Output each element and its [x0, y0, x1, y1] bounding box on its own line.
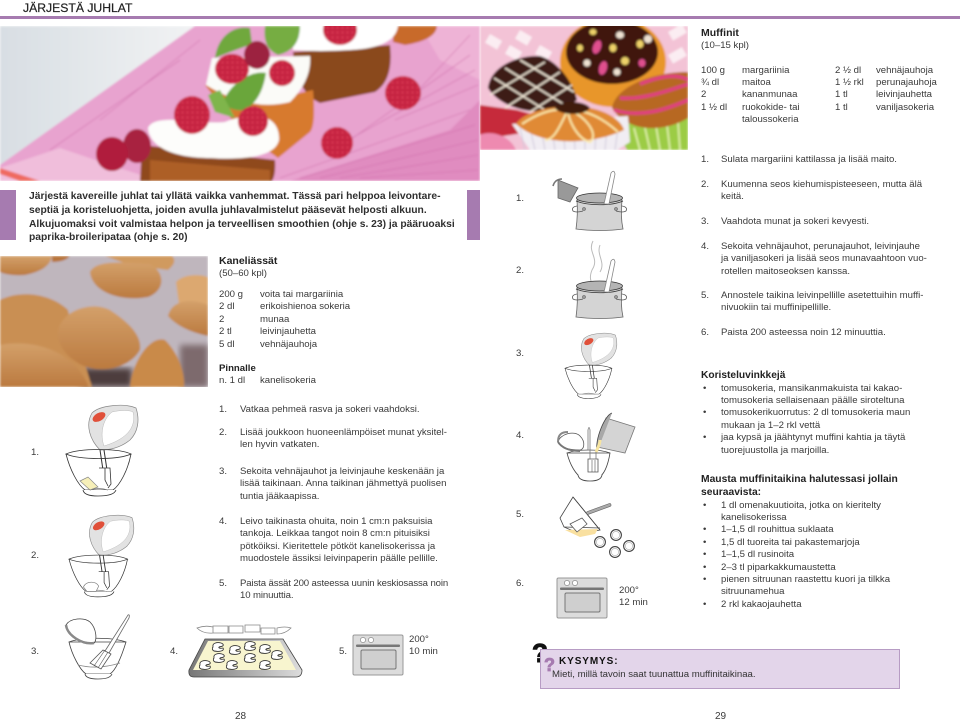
step label 2: right page: 2.: [516, 265, 524, 276]
ingredient list: Muffinit: 1 ½ rkl: [835, 77, 864, 88]
flavour variations: seuraavista:: [701, 487, 761, 498]
ingredient list: Muffinit: vaniljasokeria: [876, 102, 934, 113]
flavour variations: •: [703, 524, 706, 535]
ingredient list: Muffinit: margariinia: [742, 64, 789, 76]
flavour variations: pienen sitruunan raastettu kuori ja tilkka: [721, 574, 890, 585]
leaves: [215, 27, 252, 58]
ingredient list: Muffinit: ruokokide- tai: [742, 102, 800, 113]
ingredient list: Muffinit: vehnäjauhoja: [876, 64, 933, 76]
flavour variations: 2 rkl kakaojauhetta: [721, 599, 802, 610]
step label 3: right page: 3.: [516, 348, 524, 359]
ingredient list: Muffinit: maitoa: [742, 77, 771, 88]
ingredient list: Muffinit: taloussokeria: [742, 114, 799, 125]
steps: Muffinit: Sulata margariini kattilassa ja lisää maito.: [721, 154, 897, 165]
topping ingredients: n. 1 dl: [219, 375, 245, 386]
icon: baking sheet with S cookies: [189, 625, 302, 677]
step label 5: right page: 5.: [516, 509, 524, 520]
icon: oven: [353, 635, 403, 675]
steps: Kaneliässät: 10 minuuttia.: [240, 590, 293, 601]
illustrations: left page: [64, 404, 404, 680]
flavour variations: •: [703, 599, 706, 610]
recipe title: Kaneliässät: [219, 255, 278, 279]
ingredient list: Kaneliässät: erikoishienoa sokeria: [260, 301, 350, 312]
icon: oven: [557, 578, 607, 618]
ingredient list: Kaneliässät: 5 dl: [219, 339, 234, 350]
flavour variations: •: [703, 537, 706, 548]
steps: Muffinit: Kuumenna seos kiehumispisteeseen, mutta älä: [721, 179, 922, 190]
steps: Kaneliässät: Leivo taikinasta ohuita, noin 1 cm:n paksuisia: [240, 516, 433, 527]
intro paragraph: Alkujuomaksi voit valmistaa helpon ja terveellisen smoothien (ohje s. 23) ja pääruoaksi: [29, 219, 455, 230]
step 5 label: left page: 5.: [339, 646, 347, 657]
ingredient list: Kaneliässät: 2 tl: [219, 326, 232, 337]
steps: Kaneliässät: Lisää joukkoon huoneenlämpöiset munat yksitel-: [240, 427, 447, 438]
ingredient list: Muffinit: 1 ½ dl: [701, 102, 727, 113]
step 2 label: left page: 2.: [31, 550, 39, 561]
photo: decorated muffins: [480, 26, 688, 150]
callout text: Mieti, millä tavoin saat tuunattua muffinitaikinaa.: [552, 668, 756, 680]
cream: [293, 26, 398, 51]
decorating tips: mukaan ja 1–2 rkl vettä: [721, 420, 820, 431]
flavour variations: sitruunamehua: [721, 586, 784, 597]
steps: Kaneliässät: 4.: [219, 516, 227, 527]
steps: Kaneliässät: pötköiksi. Kieritettele pötköt kanelisokerissa ja: [240, 541, 435, 552]
topping ingredients: kanelisokeria: [260, 375, 316, 386]
decorating tips: tomusokeria sellaisenaan päälle siroteltuna: [721, 395, 904, 406]
steps: Kaneliässät: 3.: [219, 466, 227, 477]
steps: Kaneliässät: Vatkaa pehmeä rasva ja sokeri vaahdoksi.: [240, 404, 420, 415]
raspberries: [174, 96, 210, 134]
header rule: [0, 16, 960, 19]
flavour variations: kanelisokerissa: [721, 512, 787, 523]
oven setting: right page: 200°: [619, 585, 639, 596]
photo: raspberry cake slices on pink plate: [0, 26, 480, 181]
decorating tips: tuorejuustolla ja marjoilla.: [721, 445, 829, 456]
step label 6: right page: 6.: [516, 578, 524, 589]
oven setting: left page: 200°: [409, 634, 429, 645]
page heading: JÄRJESTÄ JUHLAT: [23, 1, 132, 15]
flavour variations: [701, 474, 898, 610]
chocolate cupcake: [560, 17, 666, 107]
steps: Kaneliässät: 2.: [219, 427, 227, 438]
decorating tips: tomusokeria, mansikanmakuista tai kakao-: [721, 382, 902, 394]
recipe title: Kaneliässät: (50–60 kpl): [219, 268, 267, 279]
ingredient list: Kaneliässät: leivinjauhetta: [260, 326, 316, 337]
ingredient list: Muffinit: 100 g: [701, 64, 725, 76]
steps: Muffinit: 1.: [701, 154, 709, 165]
photo: cinnamon S cookies: [0, 256, 208, 387]
ingredient list: Muffinit: kananmunaa: [742, 89, 797, 100]
flavour variations: •: [703, 500, 706, 510]
decorating tips: •: [703, 382, 706, 394]
pink frosted cupcake: [612, 118, 688, 150]
ingredient list: Kaneliässät: voita tai margariinia: [260, 289, 343, 300]
oven setting: left page: [409, 634, 438, 657]
oven setting: left page: 10 min: [409, 646, 438, 657]
ingredient list: Muffinit: 1 tl: [835, 89, 848, 100]
ingredient list: Kaneliässät: vehnäjauhoja: [260, 339, 317, 350]
intro paragraph: [29, 191, 455, 243]
steps: Muffinit: keitä.: [721, 191, 744, 202]
step labels: left page: 1.: [31, 447, 39, 458]
ingredient list: Kaneliässät: munaa: [260, 314, 289, 325]
step 4 label: left page: 4.: [170, 646, 178, 657]
steps: Muffinit: Vaahdota munat ja sokeri kevyesti.: [721, 216, 869, 227]
steps: Muffinit: [701, 154, 927, 338]
icon: mixer with eggs: [69, 515, 134, 597]
decorating tips: [701, 370, 910, 456]
ingredient list: Muffinit: 1 tl: [835, 102, 848, 113]
ingredient list: Muffinit: 2: [701, 89, 706, 100]
callout heading: KYSYMYS:: [559, 656, 618, 666]
decorating tips: •: [703, 432, 706, 443]
icon: flour bowl and brush: [66, 615, 129, 679]
steps: Kaneliässät: [219, 404, 448, 601]
steps: Muffinit: Paista 200 asteessa noin 12 minuuttia.: [721, 327, 886, 338]
step label 1: right page: 1.: [516, 193, 524, 204]
ingredient list: Muffinit: [701, 64, 937, 125]
recipe title: Muffinit: Muffinit: [701, 27, 739, 39]
piped flower cupcake: [512, 116, 630, 150]
steps: Kaneliässät: tuntia jääkaapissa.: [240, 491, 319, 502]
steps: Muffinit: Annostele taikina leivinpellille asetettuihin muffi-: [721, 290, 923, 301]
steps: Muffinit: ja vaniljasokeri ja lisää seos munavaahtoon vuo-: [721, 253, 927, 264]
decorating tips: jaa kypsä ja jäähtynyt muffini kahtia ja täytä: [721, 432, 905, 443]
flavour variations: Mausta muffinitaikina halutessasi jollain: [701, 474, 898, 484]
ingredient list: Kaneliässät: 2: [219, 314, 224, 325]
question callout: [540, 649, 900, 689]
steps: Muffinit: 6.: [701, 327, 709, 338]
ingredient list: Muffinit: leivinjauhetta: [876, 89, 932, 100]
steps: Kaneliässät: Sekoita vehnäjauhot ja leivinjauhe keskenään ja: [240, 466, 444, 477]
icon: spatula filling muffin cups: [560, 497, 634, 557]
flavour variations: •: [703, 562, 706, 573]
flavour variations: 2–3 tl piparkakkumaustetta: [721, 562, 836, 573]
flavour variations: 1–1,5 dl rouhittua suklaata: [721, 524, 834, 535]
intro paragraph: Järjestä kavereille juhlat tai yllätä vaikka vanhemmat. Tässä pari helppoa leivontare-: [29, 191, 440, 202]
recipe title: Muffinit: (10–15 kpl): [701, 40, 749, 51]
lattice cupcake: [480, 105, 570, 140]
flavour variations: 1–1,5 dl rusinoita: [721, 549, 794, 560]
cake slices: [393, 26, 437, 45]
step label 4: right page: 4.: [516, 430, 524, 441]
decorating tips: tomusokerikuorrutus: 2 dl tomusokeria maun: [721, 407, 910, 418]
ingredient list: Kaneliässät: 2 dl: [219, 301, 234, 312]
steps: Muffinit: nivuokiin tai muffinipellille.: [721, 302, 831, 313]
topping ingredients: Pinnalle: [219, 363, 256, 374]
intro paragraph: septiä ja koristeluohjetta, joiden avulla juhlavalmistelut pääsevät helposti alkuun.: [29, 205, 427, 216]
ingredient list: Muffinit: 2 ½ dl: [835, 64, 861, 76]
icon: pouring milk into pot: [553, 171, 626, 230]
decorating tips: •: [703, 407, 706, 418]
recipe title: Kaneliässät: Kaneliässät: [219, 255, 277, 267]
steps: Muffinit: rotellen maitoseoksen kanssa.: [721, 266, 850, 277]
intro paragraph: paprika-broileripataa (ohje s. 20): [29, 232, 188, 243]
ingredient list: Muffinit: ¾ dl: [701, 77, 719, 88]
ingredient list: Muffinit: perunajauhoja: [876, 77, 937, 88]
flavour variations: •: [703, 574, 706, 585]
steps: Kaneliässät: 1.: [219, 404, 227, 415]
flavour variations: 1,5 dl tuoreita tai pakastemarjoja: [721, 537, 860, 548]
center side tab: [467, 190, 480, 240]
icon: adding flour and milk to bowl: [558, 413, 635, 481]
flavour variations: •: [703, 549, 706, 560]
decorating tips: Koristeluvinkkejä: [701, 370, 785, 381]
steps: Kaneliässät: len hyvin vatkaten.: [240, 439, 319, 450]
illustrations: right page: [552, 170, 636, 618]
ingredient list: Kaneliässät: 200 g: [219, 289, 243, 300]
steps: Muffinit: 5.: [701, 290, 709, 301]
topping ingredients: [219, 363, 316, 386]
left side tab: [0, 190, 16, 240]
steps: Kaneliässät: muodostele ässiksi leivinpaperin päälle pellille.: [240, 553, 438, 564]
steps: Kaneliässät: 5.: [219, 578, 227, 589]
steps: Muffinit: 2.: [701, 179, 709, 190]
recipe title: Muffinit: [701, 27, 749, 51]
steps: Kaneliässät: Paista ässät 200 asteessa uunin keskiosassa noin: [240, 578, 448, 589]
icon: steaming pot: [572, 241, 626, 318]
flavour variations: 1 dl omenakuutioita, jotka on kieritelty: [721, 500, 881, 510]
oven setting: right page: [619, 585, 648, 608]
oven setting: right page: 12 min: [619, 597, 648, 608]
steps: Muffinit: Sekoita vehnäjauhot, perunajauhot, leivinjauhe: [721, 241, 920, 252]
steps: Muffinit: 3.: [701, 216, 709, 227]
icon: mixer beating butter: [66, 405, 138, 496]
question icon: purple: ?: [544, 655, 555, 675]
icon: mixer beating eggs and sugar: [565, 333, 617, 399]
steps: Kaneliässät: tankoja. Leikkaa tangot noin 8 cm:n pituisiksi: [240, 528, 430, 539]
ingredient list: Kaneliässät: [219, 289, 350, 350]
step 3 label: left page: 3.: [31, 646, 39, 657]
question icon: ?: [532, 638, 548, 668]
steps: Kaneliässät: lisää taikinaan. Anna taikinan jähmettyä puolisen: [240, 478, 446, 489]
steps: Muffinit: 4.: [701, 241, 709, 252]
